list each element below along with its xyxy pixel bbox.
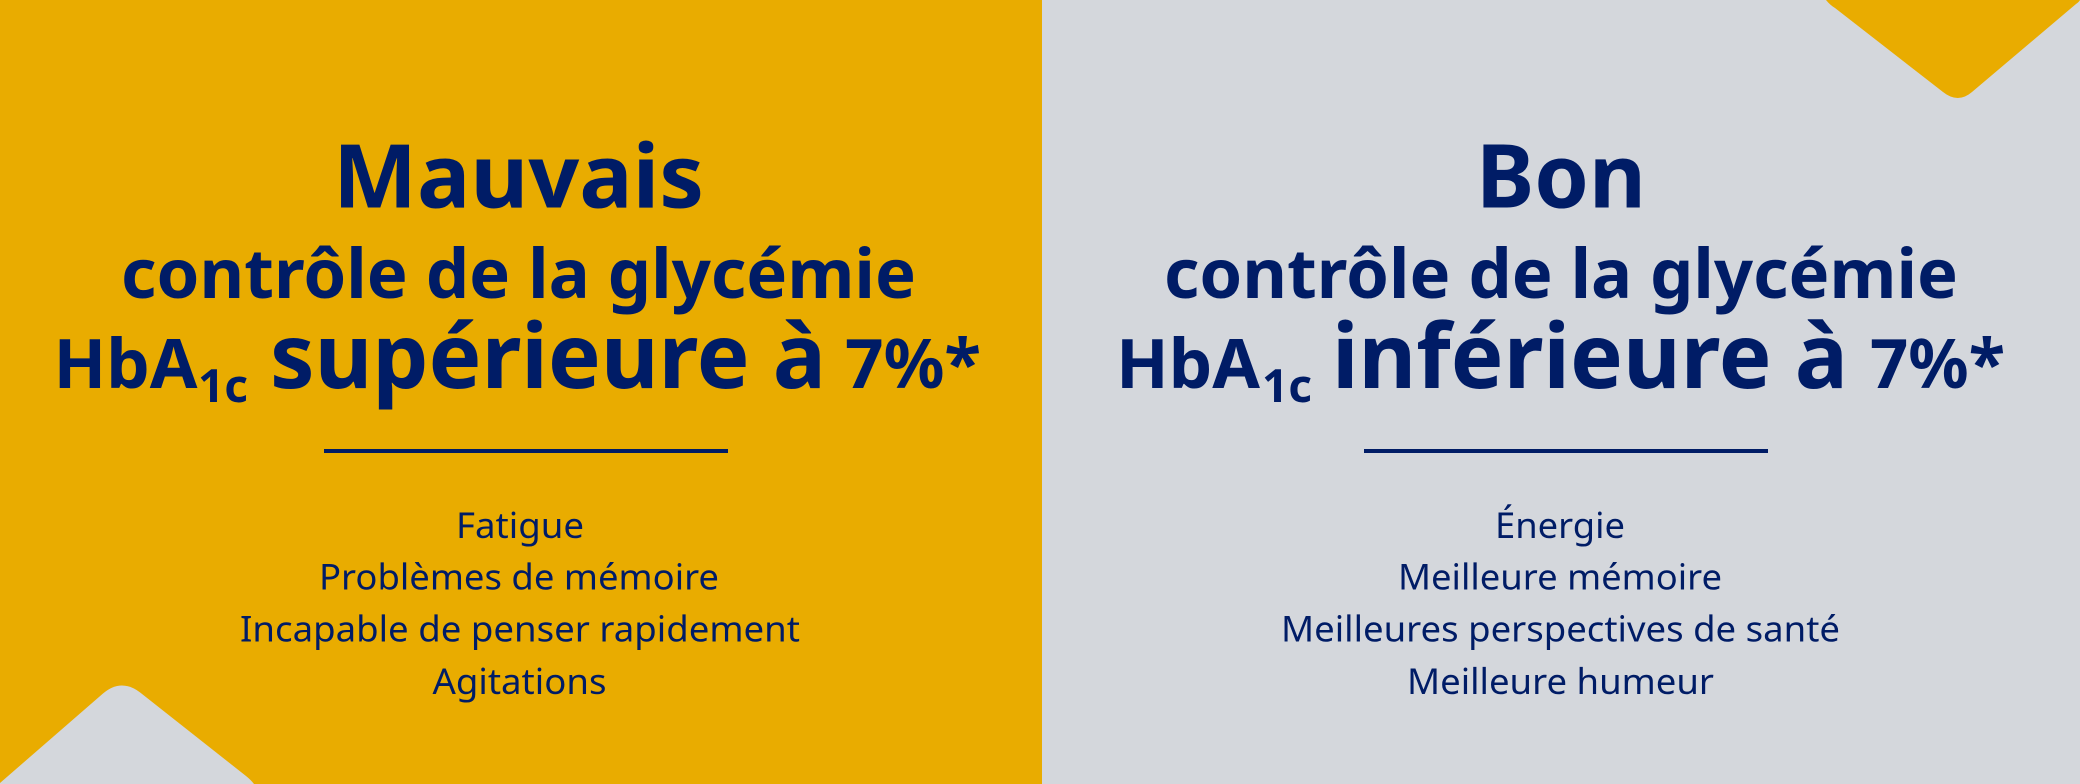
heading: HbA1c supérieure à 7%: 1c [198, 354, 248, 416]
list: benefits: Meilleure humeur [1407, 657, 1714, 705]
icon: gold corner shape [1826, 0, 2080, 98]
list: benefits: Énergie [1495, 501, 1625, 549]
heading: HbA1c inférieure à 7%: 1c [1262, 354, 1312, 416]
heading: HbA1c inférieure à 7%: HbA [1116, 315, 1261, 408]
list: symptoms [240, 501, 800, 705]
list: symptoms: Fatigue [456, 501, 584, 549]
heading: HbA1c inférieure à 7%: 7%* [1870, 315, 2005, 408]
panel: good glycemic control [1116, 0, 2080, 705]
heading: HbA1c inférieure à 7%: inférieure à [1332, 293, 1848, 415]
heading: contrôle de la glycémie: contrôle de la glycémie [121, 225, 916, 318]
list: symptoms: Agitations [432, 657, 606, 705]
heading: HbA1c supérieure à 7%: supérieure à [270, 293, 826, 415]
icon: grey corner shape [0, 685, 254, 784]
list: benefits [1281, 501, 1840, 705]
heading: HbA1c inférieure à 7% [1116, 293, 2005, 416]
list: symptoms: Incapable de penser rapidement [240, 604, 800, 652]
panel: poor glycemic control [0, 0, 1042, 784]
list: benefits: Meilleure mémoire [1398, 552, 1722, 600]
heading: HbA1c supérieure à 7% [54, 293, 981, 416]
heading: HbA1c supérieure à 7%: 7%* [845, 315, 981, 408]
list: benefits: Meilleures perspectives de santé [1281, 604, 1840, 652]
list: symptoms: Problèmes de mémoire [319, 552, 719, 600]
heading: Bon: Bon [1476, 114, 1646, 234]
heading: HbA1c supérieure à 7%: HbA [54, 315, 198, 408]
heading: contrôle de la glycémie: contrôle de la glycémie [1164, 225, 1958, 318]
heading: Mauvais: Mauvais [333, 114, 704, 234]
